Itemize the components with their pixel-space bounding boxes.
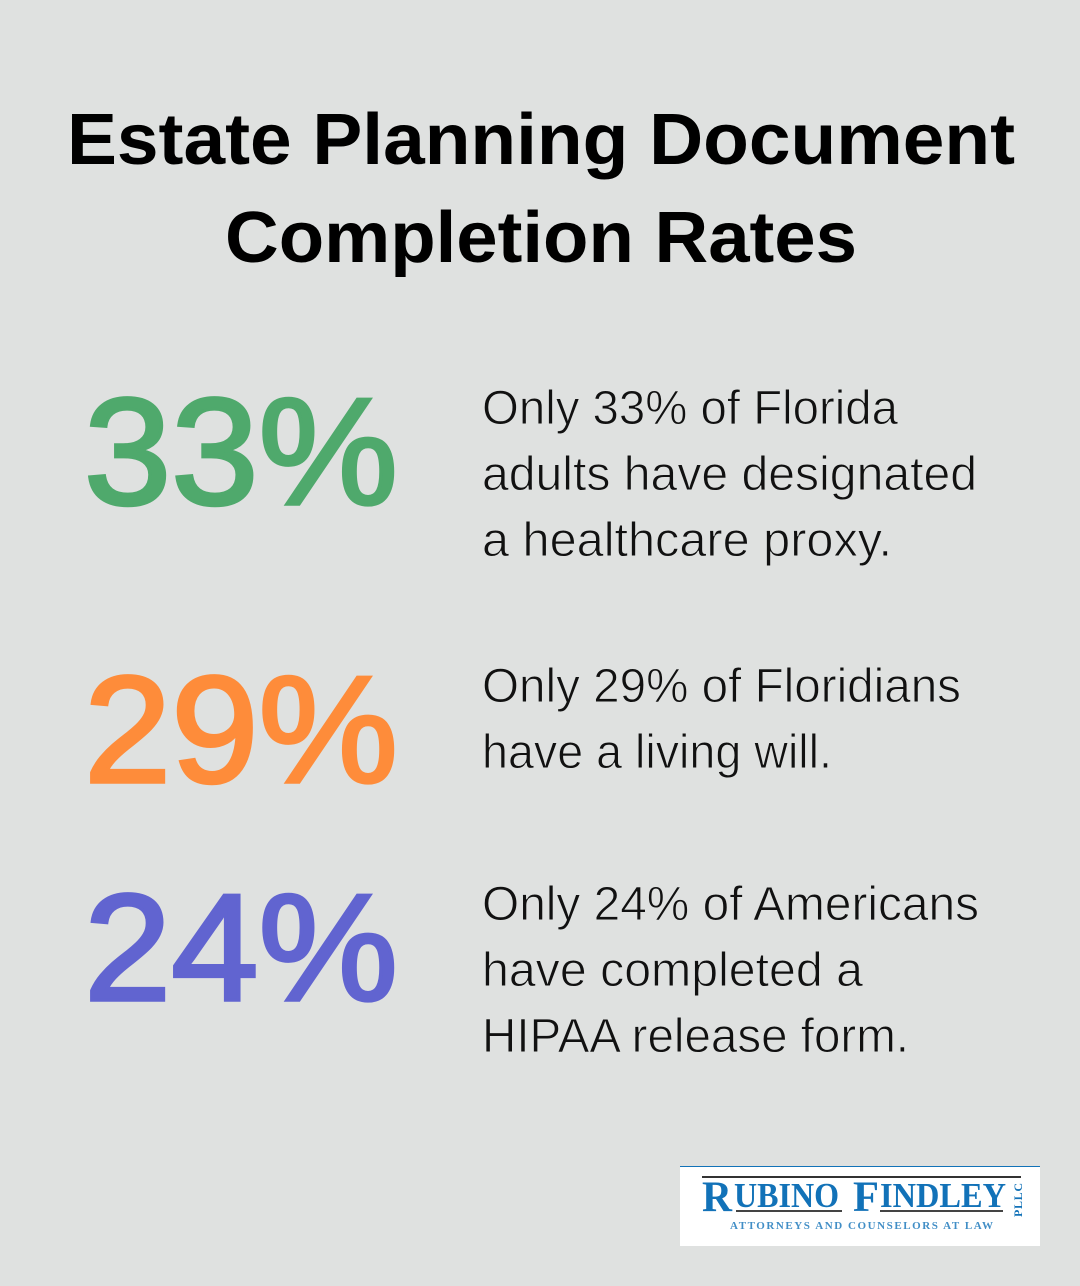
stat: 33% healthcare proxy [84, 367, 977, 567]
text: HIPAA release description: HIPAA release form. [482, 1010, 909, 1063]
text: healthcare proxy description: adults have designated [482, 448, 977, 501]
logo: Rubino Findley PLLC: PLLC [1011, 1183, 1025, 1217]
text: living will description: have a living will. [482, 726, 832, 779]
text: living will description [482, 660, 961, 779]
stat: 29% living will [84, 645, 961, 815]
text: healthcare proxy description: Only 33% of Florida [482, 382, 898, 435]
logo: Rubino Findley PLLC: INDLEY [880, 1176, 1006, 1215]
logo: Rubino Findley PLLC: R [702, 1174, 733, 1221]
number: 29%: 29% [84, 645, 398, 815]
text: healthcare proxy description: a healthcare proxy. [482, 514, 892, 567]
text: HIPAA release description [482, 878, 979, 1063]
text: HIPAA release description: have completed a [482, 944, 863, 997]
title: Estate Planning Document [67, 100, 1015, 180]
number: 24%: 24% [84, 863, 398, 1033]
logo: Rubino Findley PLLC: ATTORNEYS AND COUNSELORS AT LAW [730, 1220, 993, 1232]
text: living will description: Only 29% of Floridians [482, 660, 961, 713]
number: 33%: 33% [84, 367, 398, 537]
logo: Rubino Findley PLLC: UBINO [734, 1176, 839, 1215]
stat: 24% HIPAA release [84, 863, 979, 1063]
text: HIPAA release description: Only 24% of Americans [482, 878, 979, 931]
logo: Rubino Findley PLLC: F [853, 1174, 879, 1221]
text: healthcare proxy description [482, 382, 977, 567]
logo: Rubino Findley PLLC [680, 1166, 1040, 1246]
title: Completion Rates [225, 198, 857, 278]
title [67, 100, 1015, 278]
